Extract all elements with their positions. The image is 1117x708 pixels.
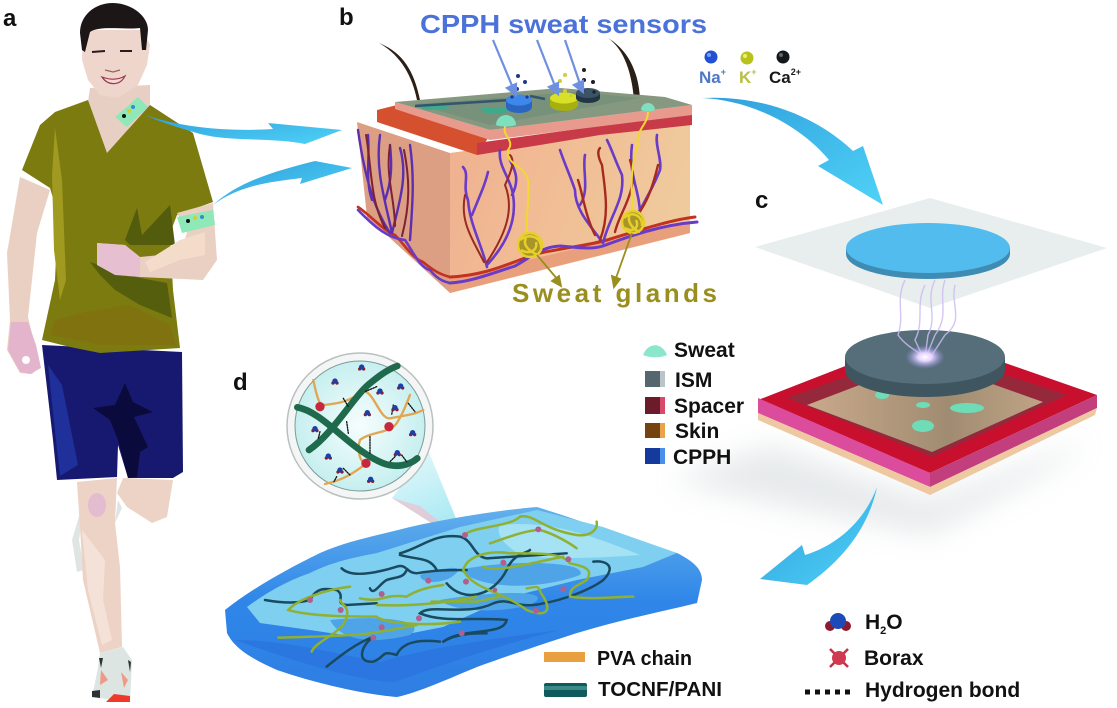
ISM disc bbox=[845, 330, 1005, 397]
label b: b bbox=[339, 4, 354, 31]
soft ground shadow bbox=[670, 440, 1090, 535]
neck sensor bbox=[115, 97, 148, 127]
frame left side bbox=[758, 398, 930, 487]
legend: layers bbox=[643, 339, 744, 469]
legend: H2O: 2 bbox=[880, 625, 886, 637]
TOCNF strands bbox=[297, 366, 417, 466]
side trees bbox=[358, 130, 413, 240]
arrow: neck sensor to skin bbox=[145, 115, 342, 144]
Na+ ion bbox=[699, 50, 726, 87]
arrow: skin to device layers bbox=[702, 98, 883, 205]
panel c: device exploded view bbox=[670, 198, 1107, 535]
arrow: arm sensor to skin bbox=[213, 161, 352, 205]
PVA chains bbox=[278, 516, 633, 652]
back leg bbox=[117, 478, 173, 523]
hairs bbox=[379, 43, 420, 100]
neck bbox=[88, 85, 150, 155]
legend: PVA chain: PVA chain bbox=[597, 648, 692, 670]
sensor discs bbox=[506, 88, 600, 113]
legend: H2O bbox=[825, 611, 903, 637]
magnifier beam bbox=[392, 450, 462, 533]
label d: d bbox=[233, 369, 248, 396]
legend: PVA chain bbox=[544, 648, 692, 670]
sweat droplets on skin bbox=[496, 115, 516, 126]
t-shirt bbox=[22, 100, 213, 353]
back shoe bbox=[72, 500, 122, 572]
glow at disc centre bbox=[905, 345, 945, 369]
arrow: device to hydrogel bbox=[760, 487, 877, 585]
left arm bbox=[7, 177, 50, 374]
Ca2+ ion bbox=[769, 50, 801, 87]
leg highlights bbox=[82, 530, 112, 645]
lower dermis strip bbox=[450, 222, 690, 293]
label c: c bbox=[755, 187, 768, 214]
Ca2+ ion: Ca bbox=[769, 68, 791, 87]
panel a: runner wearing sensors bbox=[7, 3, 217, 702]
legend: TOCNF/PANI: TOCNF/PANI bbox=[598, 679, 722, 701]
crosslink nodes bbox=[307, 526, 571, 641]
Spacer key: Spacer bbox=[674, 395, 744, 418]
CPPH disc bbox=[846, 223, 1010, 279]
Ca2+ ion: 2+ bbox=[791, 67, 801, 77]
armband sensor bbox=[177, 210, 215, 233]
polymer network bbox=[265, 516, 633, 667]
magnified inset circle bbox=[287, 353, 433, 499]
discharge sparks bbox=[898, 280, 956, 357]
red layer front bbox=[477, 113, 692, 155]
Na+ ion: Na bbox=[699, 68, 721, 87]
red layer top bbox=[377, 105, 490, 155]
water molecules bbox=[311, 364, 416, 483]
pink sensor base bbox=[395, 102, 692, 140]
K+ ion bbox=[739, 52, 757, 87]
pointers to sweat glands bbox=[537, 233, 632, 287]
PVA strands bbox=[313, 380, 423, 484]
Na+ ion: + bbox=[721, 67, 726, 77]
sweat droplets on floor bbox=[875, 391, 984, 432]
base skin layer bbox=[758, 408, 1097, 495]
glass plane bbox=[755, 198, 1107, 308]
TOCNF/PANI chains bbox=[265, 536, 610, 667]
legend: H2O: O bbox=[886, 611, 903, 634]
front shoe bbox=[92, 647, 132, 702]
sweat ducts bbox=[505, 125, 528, 235]
heading: CPPH sweat sensors: CPPH sweat sensors bbox=[420, 9, 707, 39]
pointers from title to sensors bbox=[493, 40, 583, 95]
tree 3 bbox=[631, 135, 660, 225]
panel d: hydrogel block bbox=[225, 507, 702, 697]
raised arm bbox=[97, 203, 217, 280]
label: Sweat glands: Sweat glands bbox=[512, 278, 717, 308]
frame outer top bbox=[758, 335, 1097, 473]
ion legend bbox=[699, 50, 801, 87]
light gel patches bbox=[247, 510, 677, 640]
front leg bbox=[77, 478, 122, 653]
borax nodes bbox=[315, 402, 394, 468]
shirt shading bbox=[125, 205, 175, 245]
ISM key: ISM bbox=[675, 369, 712, 392]
hydrogen bonds bbox=[318, 387, 415, 482]
legend: H2O: H bbox=[865, 611, 880, 634]
vessels bbox=[358, 130, 697, 283]
ions over sensors bbox=[510, 74, 529, 99]
frame inner opening bbox=[787, 348, 1067, 457]
skin floor bbox=[807, 360, 1043, 452]
K+ ion: K bbox=[739, 68, 751, 87]
block left face bbox=[357, 122, 450, 293]
block front face bbox=[450, 120, 690, 293]
Skin key: Skin bbox=[675, 420, 719, 443]
legend: Hydrogen bond: Hydrogen bond bbox=[865, 679, 1020, 702]
legend: Borax: Borax bbox=[864, 647, 924, 670]
sweat glands bbox=[518, 211, 644, 257]
gel body bbox=[225, 507, 702, 697]
head bbox=[80, 3, 150, 98]
legend: Borax bbox=[830, 647, 924, 670]
panel b: skin block with sensors bbox=[357, 38, 697, 293]
shorts shadow bbox=[93, 383, 153, 478]
CPPH key: CPPH bbox=[673, 446, 731, 469]
K+ ion: + bbox=[751, 67, 757, 77]
frame right side bbox=[930, 395, 1097, 487]
legend: TOCNF/PANI bbox=[544, 679, 722, 701]
tree 1 bbox=[463, 150, 516, 267]
label a: a bbox=[3, 5, 17, 32]
sensor top patch bbox=[395, 88, 692, 130]
tree 2 bbox=[560, 140, 622, 243]
shorts bbox=[42, 345, 183, 480]
Sweat key: Sweat bbox=[674, 339, 735, 362]
